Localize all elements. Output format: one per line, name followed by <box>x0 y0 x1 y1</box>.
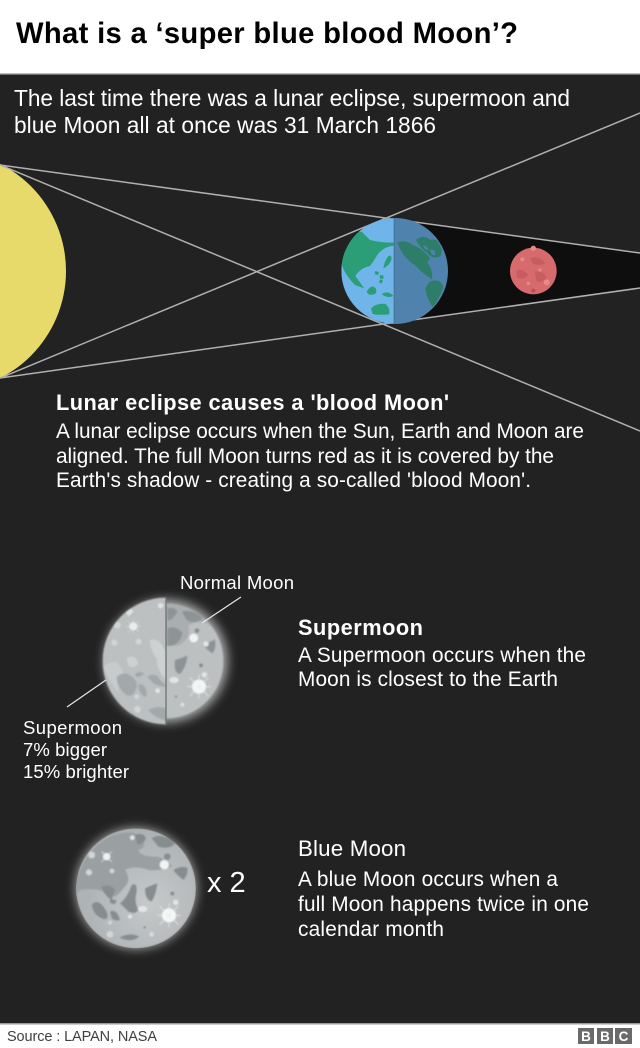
BBC logo: B <box>581 1029 591 1044</box>
BBC logo <box>578 1028 632 1044</box>
blue moon explanation: full Moon happens twice in one <box>298 893 589 916</box>
supermoon explanation: A Supermoon occurs when the <box>298 644 586 667</box>
normal moon half <box>166 602 227 722</box>
moon glow <box>76 828 196 948</box>
supermoon explanation: Moon is closest to the Earth <box>298 668 558 691</box>
lunar eclipse explanation: aligned. The full Moon turns red as it is covered by the <box>56 445 554 468</box>
light rays <box>0 113 640 431</box>
intro text: The last time there was a lunar eclipse, supermoon and <box>14 85 570 111</box>
blue moon illustration <box>73 828 196 948</box>
earth shadow <box>394 219 640 323</box>
lunar eclipse explanation: Lunar eclipse causes a 'blood Moon' <box>56 390 449 415</box>
blue moon explanation: Blue Moon <box>298 836 406 861</box>
BBC logo: C <box>619 1029 629 1044</box>
times two label: x 2 <box>207 867 246 899</box>
dark highland <box>73 832 172 898</box>
lunar eclipse explanation: Earth's shadow - creating a so-called 'blood Moon'. <box>56 469 531 492</box>
blue moon explanation <box>298 836 589 941</box>
supermoon half <box>100 597 167 727</box>
label: supermoon: Supermoon <box>23 717 122 738</box>
label: normal moon: Normal Moon <box>180 572 294 593</box>
supermoon explanation <box>298 615 586 691</box>
footer <box>0 1023 640 1048</box>
title bar: What is a ‘super blue blood Moon’? <box>16 18 518 50</box>
title bar <box>0 0 640 74</box>
intro text: blue Moon all at once was 31 March 1866 <box>14 112 436 138</box>
supermoon explanation: Supermoon <box>298 615 423 640</box>
lunar eclipse explanation <box>56 390 584 492</box>
moon glow <box>105 600 227 722</box>
sun <box>0 151 66 391</box>
blue moon explanation: calendar month <box>298 918 444 941</box>
blue moon explanation: A blue Moon occurs when a <box>298 868 558 891</box>
label: supermoon <box>23 680 129 782</box>
blood moon <box>510 246 557 294</box>
label: normal moon <box>180 572 294 623</box>
intro text <box>14 85 570 138</box>
BBC logo: B <box>600 1029 610 1044</box>
lunar eclipse explanation: A lunar eclipse occurs when the Sun, Earth and Moon are <box>56 420 584 443</box>
source: Source : LAPAN, NASA <box>7 1029 157 1045</box>
eclipse diagram <box>0 113 640 431</box>
supermoon comparison illustration <box>100 597 227 727</box>
label: supermoon: 15% brighter <box>23 761 129 782</box>
label: supermoon: 7% bigger <box>23 739 107 760</box>
earth <box>340 217 448 327</box>
